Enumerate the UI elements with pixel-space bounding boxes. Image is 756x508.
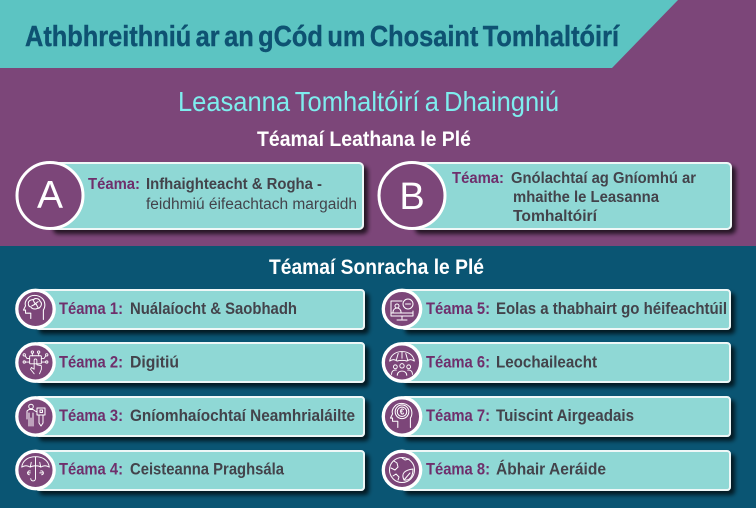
panel: theme 8: Téama 8: (426, 460, 490, 478)
icon: globe and leaf (390, 458, 414, 482)
panel: theme 5 (383, 290, 730, 329)
theme B text: Tomhaltóirí (513, 208, 598, 225)
panel: theme 1: Téama 1: (59, 300, 123, 318)
panel: theme 1 (17, 290, 364, 329)
panel: purple background (0, 0, 756, 246)
heading: broad themes: Téamaí Leathana le Plé (257, 127, 471, 151)
panel: theme 1: Nuálaíocht & Saobhadh (130, 300, 297, 318)
theme A text: Infhaighteacht & Rogha - (146, 176, 322, 193)
theme A text (88, 176, 357, 213)
heading: specific themes: Téamaí Sonracha le Plé (269, 255, 484, 279)
theme A text: feidhmiú éifeachtach margaidh (146, 196, 357, 213)
panel: theme 4: Téama 4: (59, 460, 123, 478)
icon: head with euro (390, 403, 412, 428)
theme B text: Téama: (452, 170, 504, 187)
panel: theme 6 (383, 343, 730, 382)
panel: theme 7: Téama 7: (426, 407, 490, 425)
panel: theme 6: Leochaileacht (496, 354, 597, 372)
panel: theme 2 (17, 343, 364, 382)
panel: theme A (17, 162, 363, 229)
panel: theme 7 (383, 397, 730, 436)
heading: consumer interests: Leasanna Tomhaltóirí a Dhaingniú (178, 86, 559, 117)
panel: theme 3: Téama 3: (59, 407, 123, 425)
panel: theme 7: Tuiscint Airgeadais (496, 407, 634, 425)
panel: theme 4 (17, 451, 364, 490)
panel: theme 8 (383, 451, 730, 490)
icon: umbrella with euro (22, 457, 49, 481)
icon: head with brain (23, 295, 45, 320)
panel: theme 5: Eolas a thabhairt go héifeachtúil (496, 300, 727, 318)
icon: digital hand (23, 351, 48, 374)
panel: theme 3 (17, 397, 364, 436)
panel: theme 2: Téama 2: (59, 354, 123, 372)
badge A: A (37, 174, 63, 217)
theme A text: Téama: (88, 176, 140, 193)
panel: theme 8: Ábhair Aeráide (496, 460, 606, 478)
theme B text: mhaithe le Leasanna (513, 189, 659, 206)
title: Athbhreithniú ar an gCód um Chosaint Tomhaltóirí (25, 21, 620, 53)
icon: person with sign (27, 404, 45, 426)
panel: dark blue background (0, 246, 756, 508)
panel: theme 2: Digitiú (130, 354, 179, 372)
theme B text (452, 170, 696, 225)
icon: euro sign: € (400, 408, 405, 416)
panel: theme 3: Gníomhaíochtaí Neamhrialáilte (130, 407, 355, 425)
panel: theme 4: Ceisteanna Praghsála (130, 460, 285, 478)
badge B (379, 162, 445, 228)
panel: theme B (379, 162, 731, 229)
theme B text: Gnólachtaí ag Gníomhú ar (511, 170, 696, 187)
badge B: B (399, 176, 425, 218)
panel: theme 6: Téama 6: (426, 354, 490, 372)
icon: umbrella over people (390, 352, 414, 375)
panel: theme 5: Téama 5: (426, 300, 490, 318)
icon: computer with speech bubble (391, 299, 413, 320)
title banner (0, 0, 678, 68)
badge A (17, 162, 83, 228)
